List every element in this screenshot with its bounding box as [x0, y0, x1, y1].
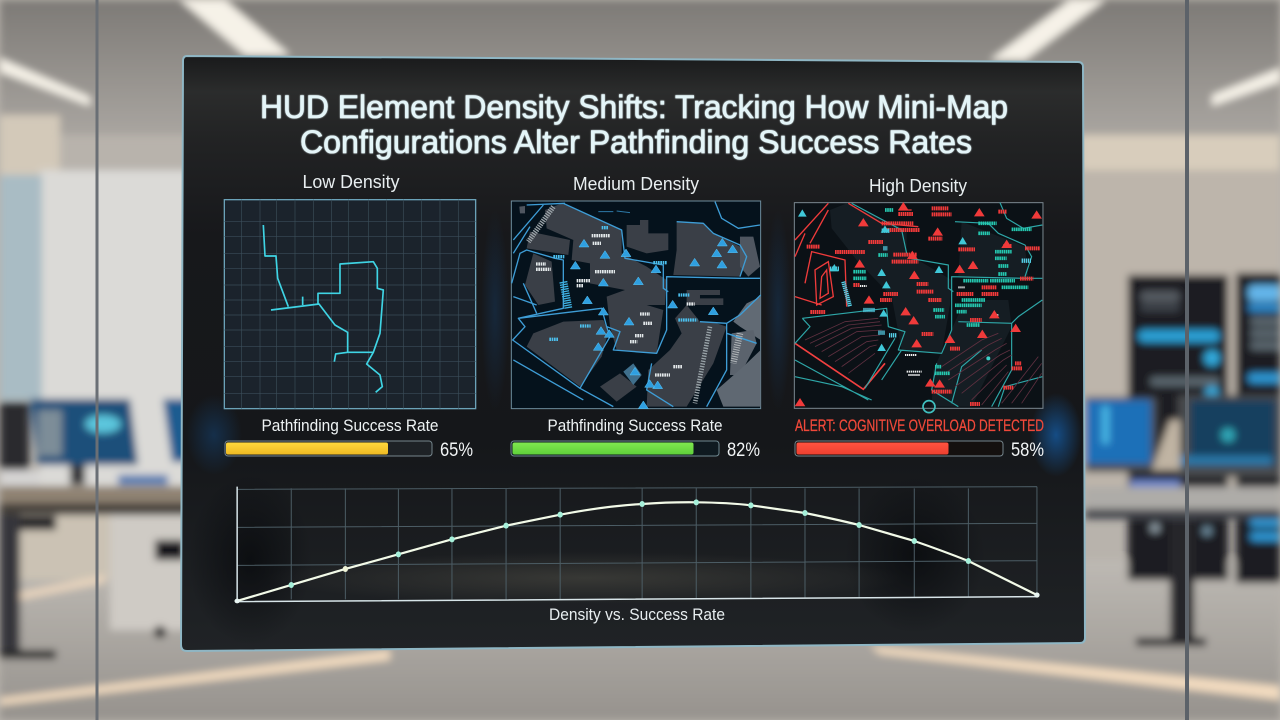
- heading: high density: High Density: [869, 176, 967, 196]
- data points: [234, 499, 1040, 603]
- value: 82%: 82%: [727, 440, 760, 461]
- success curve: [237, 502, 1037, 601]
- progress bar: high density: [795, 441, 1003, 456]
- chart caption: Density vs. Success Rate: [549, 605, 725, 624]
- mini-map: low density: [224, 200, 476, 409]
- heading: low density: Low Density: [302, 172, 400, 192]
- metric label: medium density: Pathfinding Success Rate: [548, 416, 722, 435]
- glass panel: [181, 56, 1085, 651]
- title: [260, 89, 1008, 160]
- progress bar: medium density: [511, 441, 719, 456]
- progress bar: low density: [225, 441, 432, 456]
- panel: low density: [224, 172, 476, 461]
- title: HUD Element Density Shifts: Tracking How Mini-Map: [260, 89, 1008, 125]
- mini-map: high density: [794, 202, 1043, 413]
- heading: medium density: Medium Density: [573, 174, 699, 194]
- value: 65%: 65%: [440, 440, 473, 461]
- mini-map: medium density: [511, 201, 761, 409]
- alert label: cognitive overload: ALERT: COGNITIVE OVERLOAD DETECTED: [795, 416, 1044, 435]
- value: 58%: 58%: [1011, 440, 1044, 461]
- panel: high density: [794, 176, 1044, 461]
- metric label: low density: Pathfinding Success Rate: [262, 416, 438, 435]
- panel: medium density: [511, 174, 761, 461]
- line chart: density vs. success rate: [234, 487, 1040, 603]
- title: Configurations Alter Pathfinding Success Rates: [300, 124, 972, 160]
